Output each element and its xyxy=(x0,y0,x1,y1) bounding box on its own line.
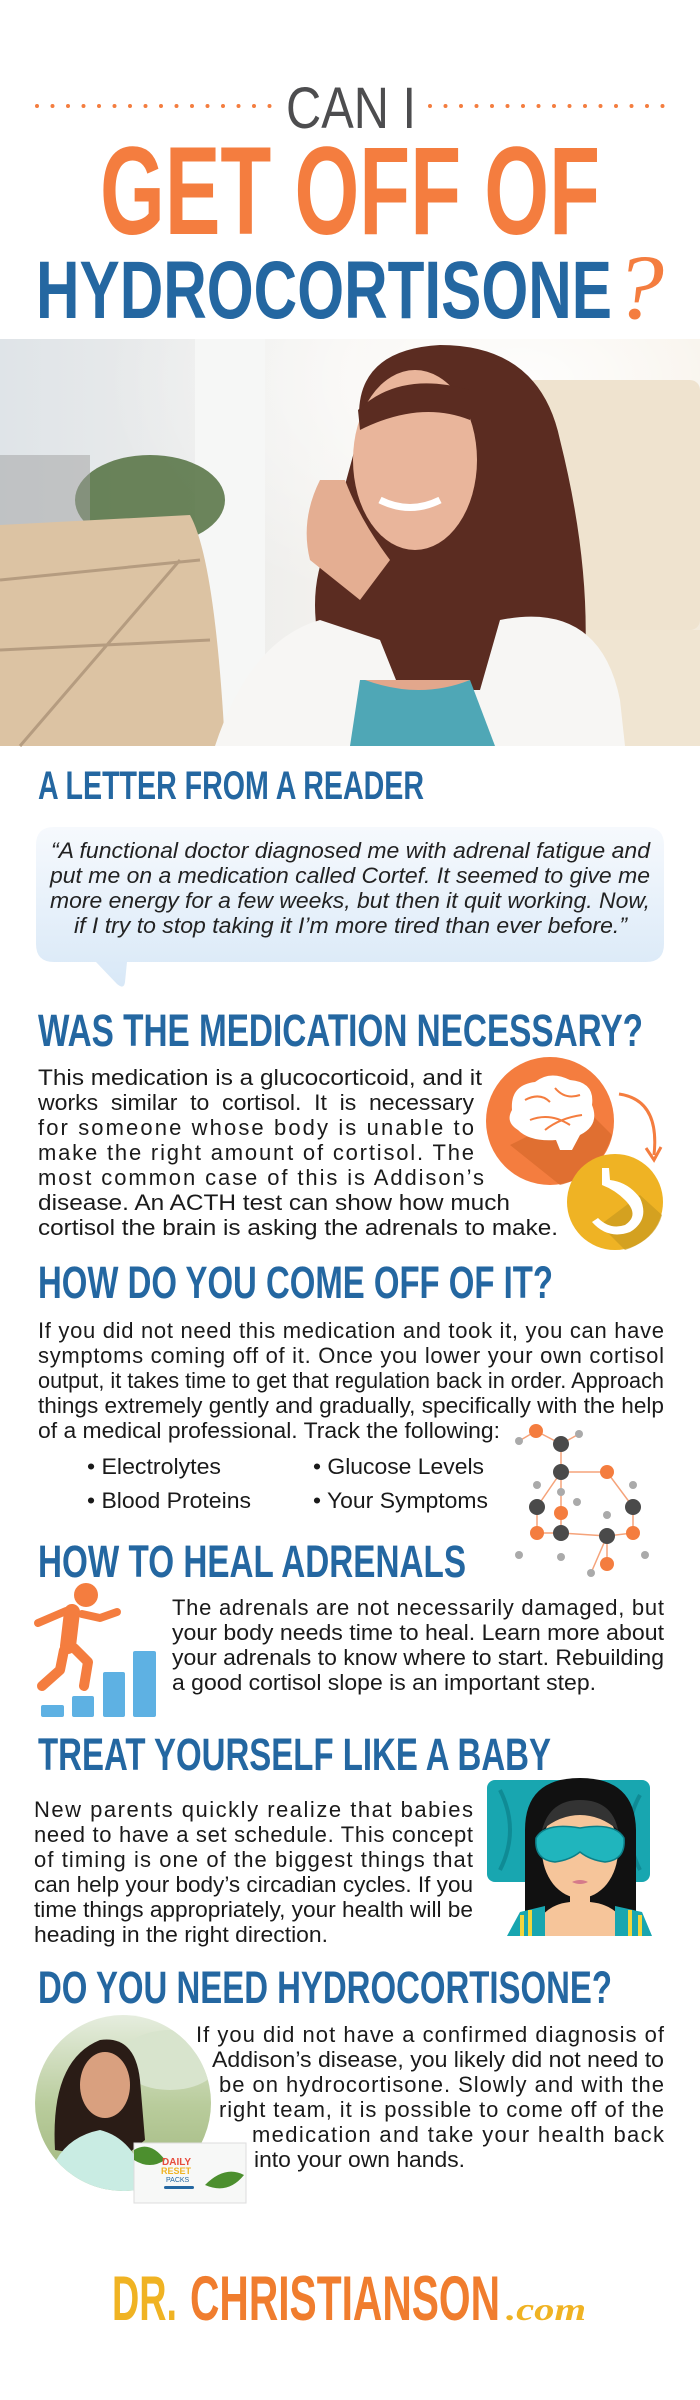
text block: baby: New parents quickly realize that babies xyxy=(34,1797,473,1822)
text block: coming off: symptoms coming off of it. Once you lower your own cortisol xyxy=(38,1343,664,1368)
text block: coming off xyxy=(38,1318,664,1443)
text block: coming off: of a medical professional. Track the following: xyxy=(38,1418,500,1443)
text block: baby: heading in the right direction. xyxy=(34,1922,328,1947)
footer logo: DR. xyxy=(112,2264,177,2334)
text block: medication: disease. An ACTH test can show how much xyxy=(38,1190,510,1215)
text block: medication: most common case of this is Addison’s xyxy=(38,1165,484,1190)
text block: medication: for someone whose body is unable to xyxy=(38,1115,474,1140)
text block: baby: can help your body’s circadian cycles. If you xyxy=(34,1872,473,1897)
text block: need: medication and take your health back xyxy=(252,2122,665,2147)
text block: baby xyxy=(34,1797,473,1947)
dotted rule left xyxy=(37,104,272,108)
text block: heal: a good cortisol slope is an important step. xyxy=(172,1670,596,1695)
list: tracking items xyxy=(87,1454,488,1513)
icon: stomach circle xyxy=(567,1154,663,1250)
icon: molecule xyxy=(515,1424,649,1577)
text block: medication: make the right amount of cortisol. The xyxy=(38,1140,474,1165)
text block: medication: This medication is a glucocorticoid, and it xyxy=(38,1065,482,1090)
callout: reader quote bubble: more energy for a few weeks, but then it quit working. Now, xyxy=(50,888,650,913)
text block: baby: of timing is one of the biggest things that xyxy=(34,1847,473,1872)
icon: brain to stomach xyxy=(486,1057,663,1250)
list: tracking items: • Blood Proteins xyxy=(87,1488,251,1513)
photo: woman and product box: DAILY xyxy=(162,2157,191,2168)
icon: runner climbing bars xyxy=(38,1583,156,1717)
list: tracking items: • Your Symptoms xyxy=(313,1488,488,1513)
text block: baby: time things appropriately, your health will be xyxy=(34,1897,473,1922)
text block: heal: your adrenals to know where to start. Rebuilding xyxy=(172,1645,664,1670)
title: ? xyxy=(614,236,664,338)
text block: medication: cortisol the brain is asking the adrenals to make. xyxy=(38,1215,558,1240)
hero photo: smiling woman xyxy=(0,339,700,746)
heading: how to heal adrenals: HOW TO HEAL ADRENALS xyxy=(38,1536,466,1587)
footer logo: CHRISTIANSON xyxy=(190,2264,500,2334)
callout: reader quote bubble xyxy=(36,827,664,987)
footer logo: .com xyxy=(506,2291,586,2327)
callout: reader quote bubble: if I try to stop taking it I’m more tired than ever before.” xyxy=(74,913,629,938)
photo: woman and product box: PACKS xyxy=(166,2177,190,2184)
title xyxy=(36,76,665,338)
text block: medication: works similar to cortisol. It is necessary xyxy=(37,1090,474,1115)
text block: heal xyxy=(172,1595,664,1695)
text block: need xyxy=(196,2022,665,2172)
text block: need: Addison’s disease, you likely did not need to xyxy=(212,2047,664,2072)
text block: baby: need to have a set schedule. This concept xyxy=(34,1822,473,1847)
text block: medication xyxy=(37,1065,558,1240)
heading: a letter from a reader: A LETTER FROM A READER xyxy=(38,764,424,808)
text block: coming off: If you did not need this medication and took it, you can have xyxy=(38,1318,664,1343)
text block: heal: The adrenals are not necessarily damaged, but xyxy=(172,1595,664,1620)
arrow xyxy=(619,1094,655,1155)
callout: reader quote bubble: “A functional doctor diagnosed me with adrenal fatigue and xyxy=(51,838,651,863)
list: tracking items: • Glucose Levels xyxy=(313,1454,484,1479)
callout: reader quote bubble: put me on a medication called Cortef. It seemed to give me xyxy=(49,863,650,888)
text block: coming off: things extremely gently and gradually, specifically with the help xyxy=(38,1393,664,1418)
text block: need: If you did not have a confirmed diagnosis of xyxy=(196,2022,665,2047)
dotted rule right xyxy=(430,104,665,108)
icon: sleeping woman with eye mask xyxy=(487,1778,652,1936)
photo: woman and product box xyxy=(30,2010,246,2203)
text block: need: be on hydrocortisone. Slowly and with the xyxy=(219,2072,664,2097)
photo: woman and product box: RESET xyxy=(161,2166,192,2176)
title: CAN I xyxy=(286,76,416,141)
text block: heal: your body needs time to heal. Learn more about xyxy=(172,1620,664,1645)
icon: brain circle xyxy=(486,1057,614,1185)
text block: need: right team, it is possible to come off of the xyxy=(219,2097,664,2122)
text block: need: into your own hands. xyxy=(254,2147,465,2172)
text block: coming off: output, it takes time to get that regulation back in order. Approach xyxy=(38,1368,664,1393)
list: tracking items: • Electrolytes xyxy=(87,1454,221,1479)
